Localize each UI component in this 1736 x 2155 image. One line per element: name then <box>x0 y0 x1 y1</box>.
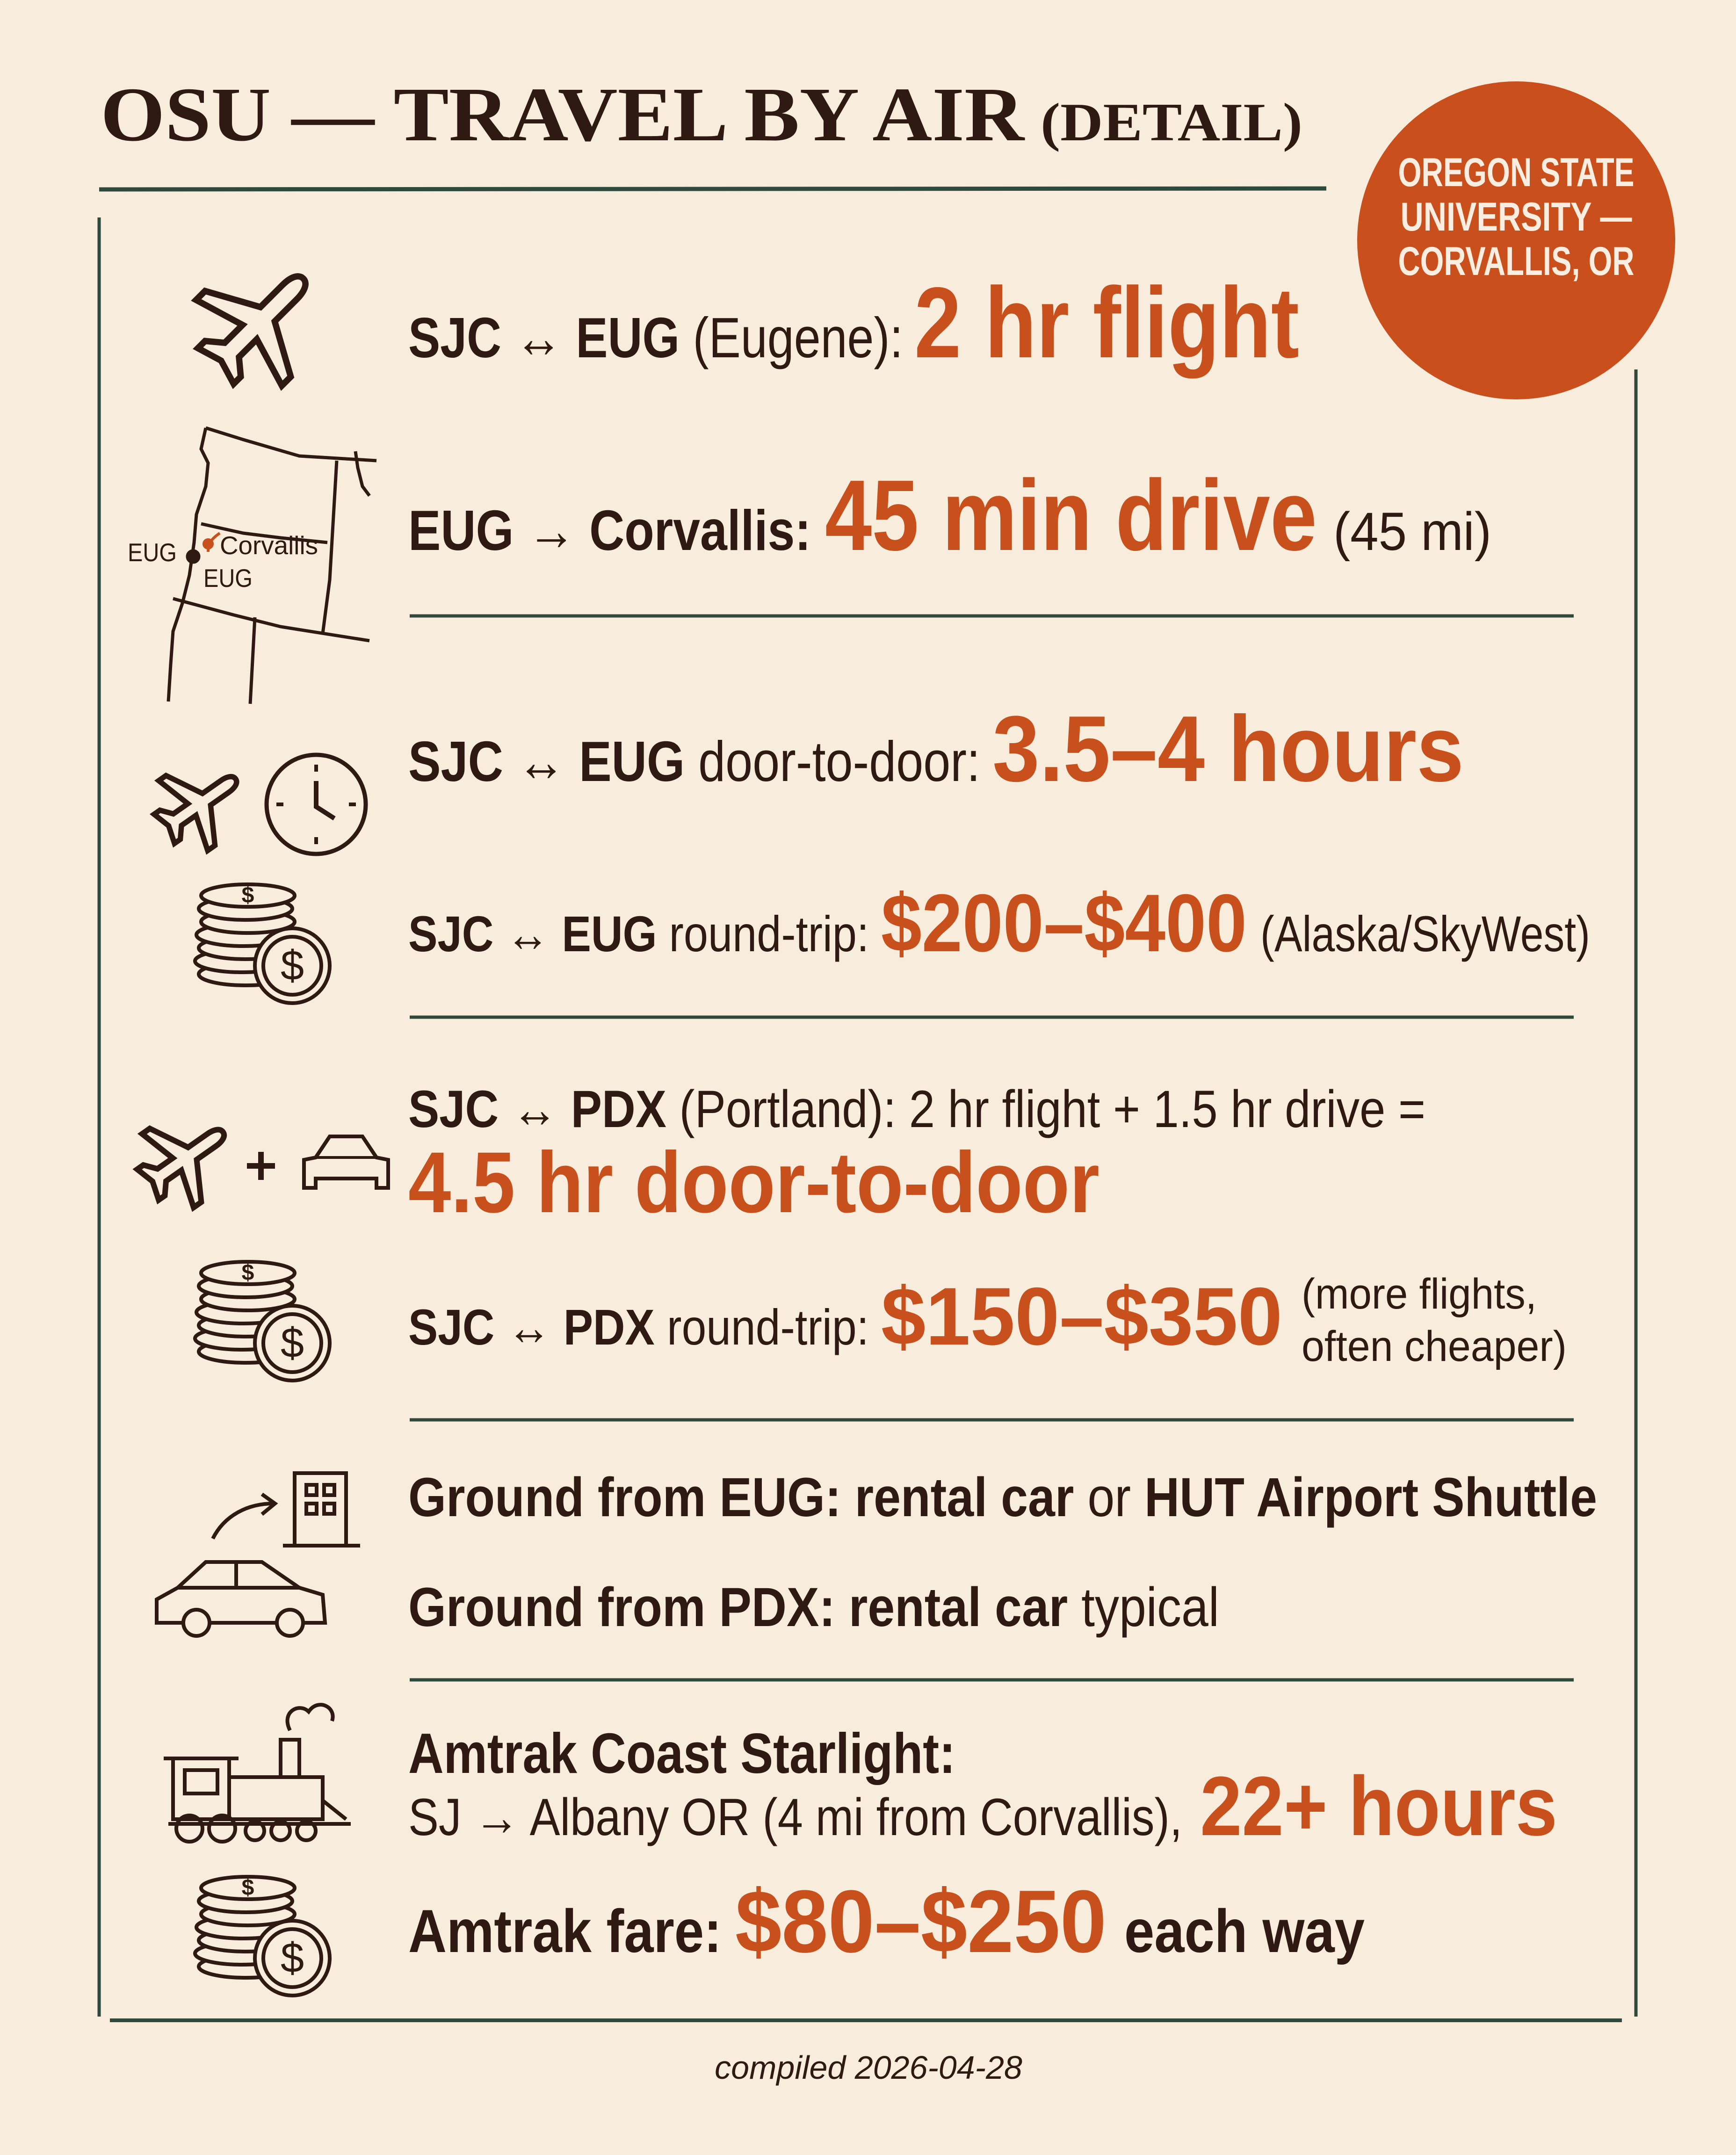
row8 text <box>408 1721 1557 1853</box>
row2 text: (45 mi) <box>1333 502 1491 562</box>
row8 text: 22+ hours <box>1200 1759 1557 1853</box>
row9 text: Amtrak fare <box>408 1872 1365 1971</box>
row7 text: Ground from PDX: rental car typical <box>408 1576 1219 1638</box>
title: OSU — TRAVEL BY AIR <box>101 72 1025 157</box>
row2 text: EUG → Corvallis: <box>408 499 811 562</box>
row8 text: SJ → Albany OR (4 mi from Corvallis), <box>408 1788 1182 1846</box>
row3 text: SJC ↔ EUG door-to-door: <box>408 730 980 793</box>
icon: car + building <box>157 1473 360 1636</box>
icon: plane row1 <box>173 236 346 409</box>
footer: compiled 2026-04-28 <box>715 2049 1022 2086</box>
frame <box>99 217 1636 2020</box>
row9 text: Amtrak fare: each way <box>1124 1897 1365 1965</box>
row3 text: 3.5–4 hours <box>992 697 1464 801</box>
row1 text <box>408 266 1299 379</box>
icon: plane + clock <box>140 744 366 864</box>
row4 text: (Alaska/SkyWest) <box>1260 905 1590 962</box>
row5 text: 4.5 hr door-to-door <box>408 1135 1099 1231</box>
row8 text: Amtrak Coast Starlight: <box>408 1721 955 1785</box>
row5 text <box>408 1080 1425 1231</box>
icon: train <box>164 1705 351 1842</box>
row2 text <box>408 459 1491 571</box>
title: (DETAIL) <box>1041 93 1302 152</box>
badge: Oregon State University <box>1357 81 1675 399</box>
row3 text <box>408 697 1464 801</box>
icon: coins row6: $ <box>281 1320 304 1367</box>
row4 text: SJC ↔ EUG round-trip: <box>408 905 869 962</box>
row1 text: SJC ↔ EUG (Eugene): <box>408 306 903 369</box>
row6 text: (more flights, <box>1302 1270 1537 1318</box>
icon: coins row6: $ <box>242 1260 254 1285</box>
badge: Oregon State University: CORVALLIS, OR <box>1398 239 1634 284</box>
row1 text: 2 hr flight <box>914 266 1299 379</box>
badge: Oregon State University: UNIVERSITY — <box>1400 195 1632 239</box>
row4 text: $200–$400 <box>881 878 1247 969</box>
badge: Oregon State University: OREGON STATE <box>1398 150 1634 195</box>
icon: coins row4 <box>195 883 330 1003</box>
icon: map of Oregon: EUG <box>128 538 177 567</box>
icon: coins row8 <box>195 1875 330 1996</box>
icon: coins row4: $ <box>242 883 254 908</box>
icon: coins row8: $ <box>281 1935 304 1981</box>
row6 text: $150–$350 <box>881 1271 1282 1362</box>
row7 text: Ground from EUG: rental car or HUT Airport Shuttle <box>408 1467 1597 1528</box>
row6 text: often cheaper) <box>1302 1323 1567 1370</box>
icon: map of Oregon: EUG <box>203 564 253 593</box>
row6 text <box>408 1270 1567 1370</box>
row2 text: 45 min drive <box>825 459 1317 571</box>
row5 text: SJC ↔ PDX (Portland): 2 hr flight + 1.5 hr drive = <box>408 1080 1425 1138</box>
row7 text <box>408 1467 1597 1638</box>
icon: plane + car <box>122 1095 388 1222</box>
icon: map of Oregon <box>128 428 376 704</box>
row4 text <box>408 878 1590 969</box>
icon: coins row4: $ <box>281 942 304 989</box>
icon: coins row8: $ <box>242 1875 254 1900</box>
icon: coins row6 <box>195 1260 330 1381</box>
row9 text: Amtrak fare: Amtrak fare: <box>408 1897 722 1965</box>
row6 text: SJC ↔ PDX round-trip: <box>408 1299 869 1355</box>
row9 text: Amtrak fare: $80–$250 <box>735 1872 1107 1971</box>
icon: map of Oregon: Corvallis <box>220 531 318 560</box>
